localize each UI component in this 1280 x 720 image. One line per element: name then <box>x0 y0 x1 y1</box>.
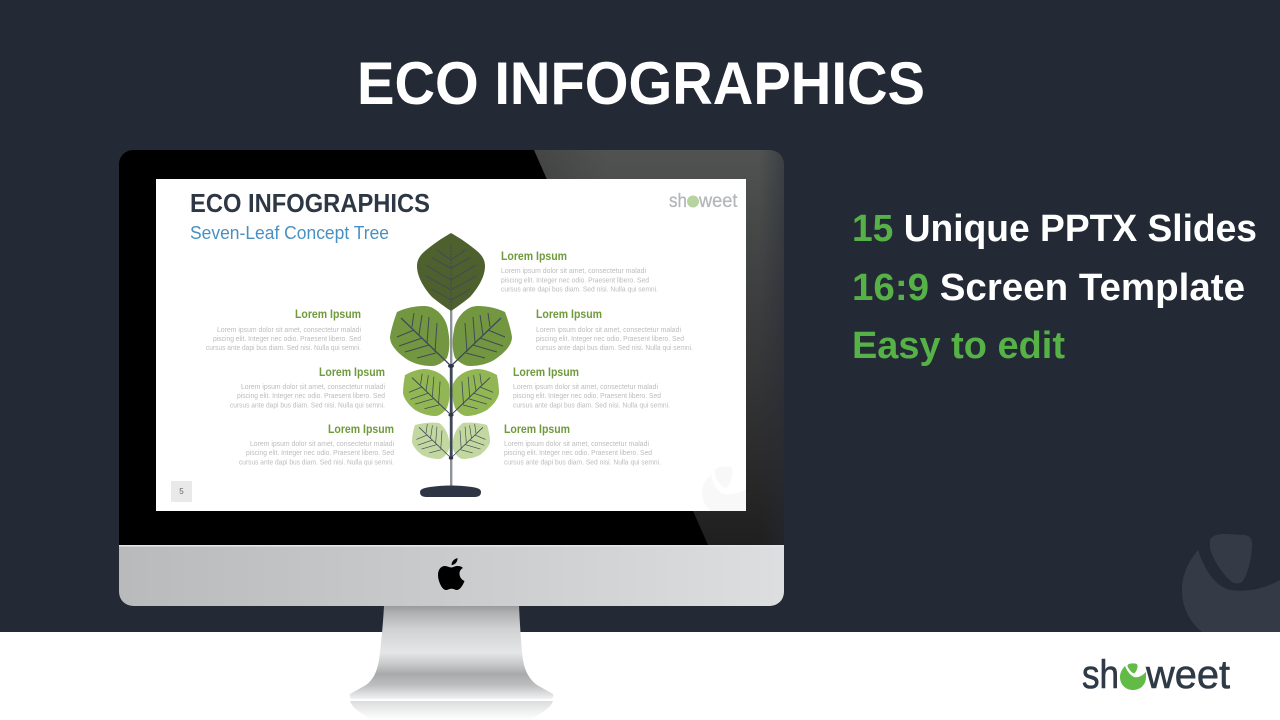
page number <box>171 481 192 502</box>
icon: apple logo <box>438 558 464 590</box>
monitor chin <box>119 545 784 606</box>
leaf: middle left <box>403 369 451 416</box>
callout: middle left: piscing elit. Integer nec odio. Praesent libero. Sed <box>237 393 385 400</box>
callout: upper left: Lorem Ipsum <box>295 309 361 321</box>
watermark logo <box>1182 534 1280 632</box>
slide logo <box>669 191 738 212</box>
callout: third right: piscing elit. Integer nec odio. Praesent libero. Sed <box>513 393 661 400</box>
showeet logo: weet <box>1145 653 1230 697</box>
feature: easy to edit: Easy to edit <box>852 325 1065 367</box>
stem <box>450 308 453 488</box>
callout: fourth right <box>504 424 661 466</box>
slide watermark <box>702 467 746 511</box>
white footer band <box>0 632 1280 720</box>
panel: slide on screen <box>156 179 746 511</box>
leaf: lower right <box>451 423 490 459</box>
callout: upper left: Lorem ipsum dolor sit amet, consectetur maladi <box>217 327 361 334</box>
callout: second right: Lorem ipsum dolor sit amet, consectetur maladi <box>536 327 681 334</box>
callout: fourth right: piscing elit. Integer nec odio. Praesent libero. Sed <box>504 450 652 457</box>
callout: middle left: Lorem ipsum dolor sit amet, consectetur maladi <box>241 384 385 391</box>
callout: middle left: cursus ante dapi bus diam. Sed nisi. Nulla qui semni. <box>230 402 385 410</box>
callout: lower left: Lorem ipsum dolor sit amet, consectetur maladi <box>250 441 394 448</box>
slide logo: sh <box>669 191 687 212</box>
callout: second right: Lorem Ipsum <box>536 309 602 321</box>
feature: slide count: 15 Unique PPTX Slides <box>852 208 1257 250</box>
callout: third right: Lorem Ipsum <box>513 367 579 379</box>
callout: upper left: cursus ante dapi bus diam. Sed nisi. Nulla qui semni. <box>206 345 361 352</box>
callout: middle left: Lorem Ipsum <box>319 367 385 379</box>
callout: top right: piscing elit. Integer nec odio. Praesent libero. Sed <box>501 278 649 284</box>
icon: logo leaf <box>1120 663 1146 690</box>
monitor <box>119 150 784 606</box>
leaf: upper right <box>451 306 512 366</box>
slide title: ECO INFOGRAPHICS <box>190 188 430 218</box>
callout: top right: Lorem Ipsum <box>501 251 567 263</box>
callout: lower left: piscing elit. Integer nec odio. Praesent libero. Sed <box>246 450 394 457</box>
leaf: upper left <box>390 306 451 366</box>
callout: second right: cursus ante dapi bus diam. Sed nisi. Nulla qui semni. <box>536 345 693 352</box>
callout: second right <box>536 309 693 352</box>
callout: top right <box>501 251 658 294</box>
leaf: middle right <box>451 369 499 416</box>
page number: 5 <box>179 487 184 496</box>
callout: lower left: Lorem Ipsum <box>328 424 394 436</box>
leaf: top <box>417 233 485 311</box>
monitor stand <box>350 606 553 720</box>
screen gloss <box>534 150 784 545</box>
callout: middle left <box>230 367 385 410</box>
tree base <box>420 486 481 497</box>
showeet logo: sh <box>1082 653 1119 697</box>
callout: fourth right: Lorem Ipsum <box>504 424 570 436</box>
callout: third right: Lorem ipsum dolor sit amet, consectetur maladi <box>513 384 658 391</box>
callout: upper left: piscing elit. Integer nec odio. Praesent libero. Sed <box>213 336 361 343</box>
callout: lower left: cursus ante dapi bus diam. Sed nisi. Nulla qui semni. <box>239 460 394 466</box>
stem nodes <box>448 364 454 460</box>
leaf: lower left <box>412 423 451 459</box>
callout: fourth right: cursus ante dapi bus diam. Sed nisi. Nulla qui semni. <box>504 460 661 466</box>
slide subtitle: Seven-Leaf Concept Tree <box>190 223 389 243</box>
showeet logo <box>1082 653 1230 697</box>
callout: upper left <box>206 309 361 352</box>
tree <box>390 233 512 497</box>
callout: second right: piscing elit. Integer nec odio. Praesent libero. Sed <box>536 336 684 343</box>
callout: third right <box>513 367 670 410</box>
callout: lower left <box>239 424 394 466</box>
callout: third right: cursus ante dapi bus diam. Sed nisi. Nulla qui semni. <box>513 402 670 410</box>
feature: screen format: 16:9 Screen Template <box>852 267 1245 309</box>
slide logo: weet <box>698 191 738 212</box>
main title: ECO INFOGRAPHICS <box>357 50 925 117</box>
callout: fourth right: Lorem ipsum dolor sit amet, consectetur maladi <box>504 441 649 448</box>
callout: top right: Lorem ipsum dolor sit amet, consectetur maladi <box>501 268 646 275</box>
callout: top right: cursus ante dapi bus diam. Sed nisi. Nulla qui semni. <box>501 286 658 294</box>
